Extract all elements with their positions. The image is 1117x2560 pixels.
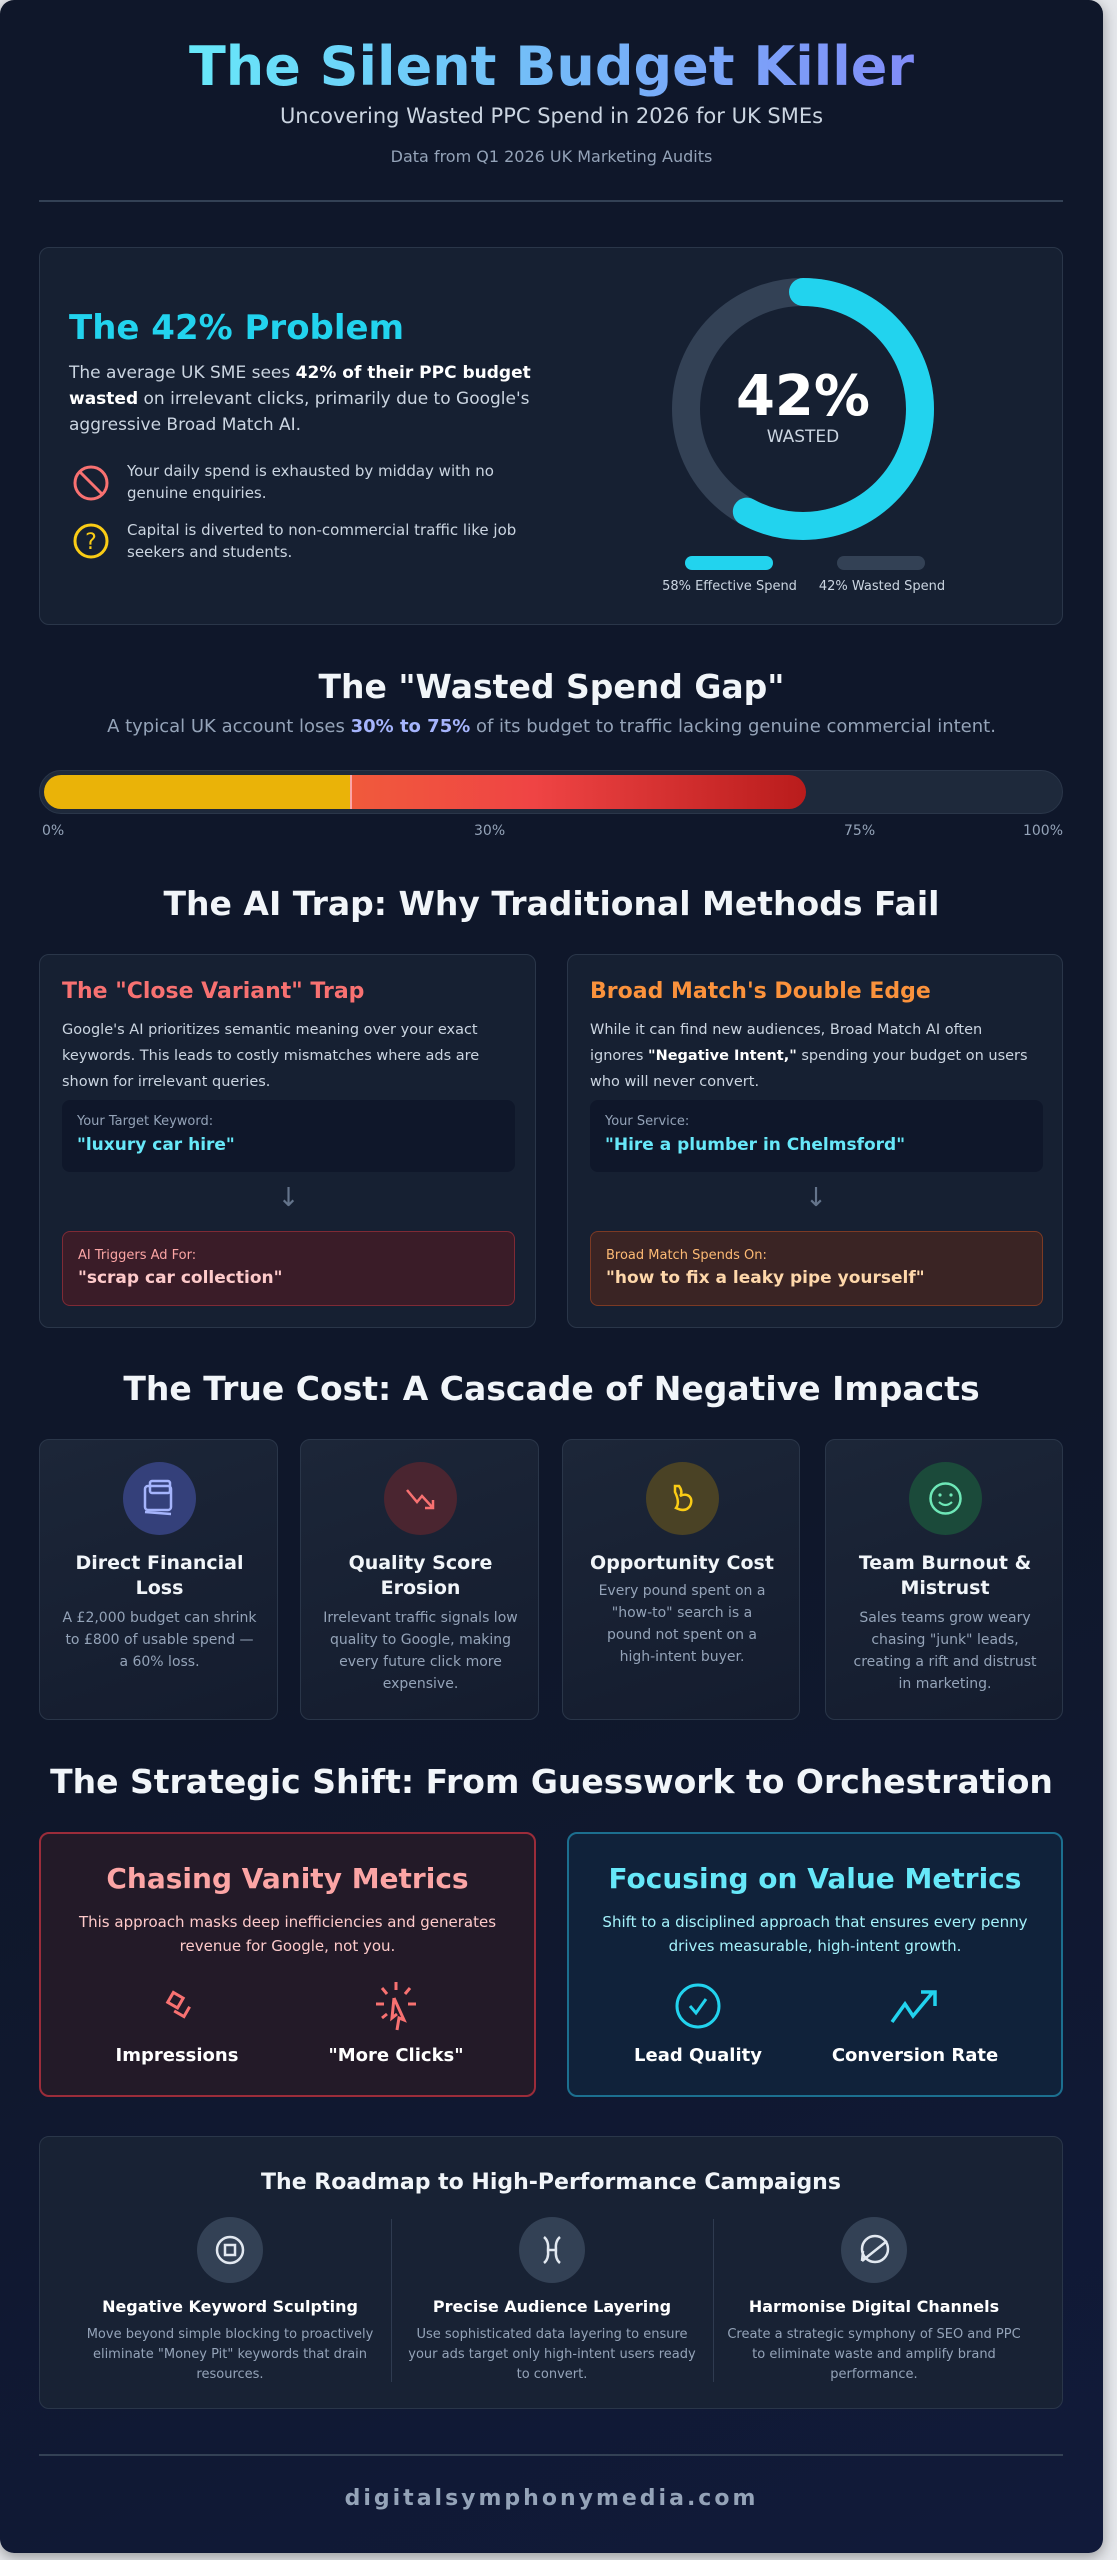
icon: trending down [384,1462,457,1535]
panel: value metrics: Focusing on Value Metrics [609,1862,1021,1895]
card: opportunity cost [562,1439,800,1720]
box: service [590,1100,1043,1172]
card: opportunity cost: Every pound spent on a "how-to" search is a pound not spent on a high-intent buyer. [599,1583,765,1665]
box: target keyword [62,1100,515,1172]
donut chart: WASTED [767,427,839,447]
paragraph: The average UK SME sees 42% of their PPC budget wasted on irrelevant clicks, primarily due to Google's aggressive Broad Match AI. [69,363,531,435]
bar labels [42,823,1063,839]
box: spends on: Broad Match Spends On: [606,1248,767,1263]
panel: broad match [567,954,1063,1328]
card: direct financial loss [39,1439,278,1720]
box: triggered query [62,1231,515,1306]
arrow: ↓ [805,1183,827,1213]
metric: impressions [116,1990,238,2066]
panel: broad match: While it can find new audiences, Broad Match AI often ignores "Negative Intent," spending your budget on users who will never convert. [590,1022,1028,1090]
metric: more clicks [328,1982,464,2066]
icon: question: ? [85,530,97,555]
step: negative keyword sculpting: Move beyond simple blocking to proactively eliminate "Money Pit" keywords that drain resources. [87,2327,373,2382]
metric: conversion rate [832,1990,998,2066]
panel: value metrics [567,1832,1063,2097]
item: diverted capital: Capital is diverted to non-commercial traffic like job seekers and students. [127,521,516,561]
step: negative keyword sculpting: Negative Keyword Sculpting [102,2297,358,2316]
box: service: "Hire a plumber in Chelmsford" [605,1135,905,1155]
data source: Data from Q1 2026 UK Marketing Audits [391,147,712,166]
icon: wallet [123,1462,196,1535]
box: target keyword: Your Target Keyword: [77,1114,213,1129]
heading: 42% problem: The 42% Problem [69,308,404,348]
card: team burnout: Sales teams grow weary chasing "junk" leads, creating a rift and distrust in marketing. [854,1610,1036,1692]
item: no enquiries: Your daily spend is exhausted by midday with no genuine enquiries. [127,462,494,502]
donut chart: 42% [736,364,870,429]
panel: value metrics: Shift to a disciplined approach that ensures every penny drives measurable, high-intent growth. [602,1913,1028,1955]
step: harmonise channels: Create a strategic symphony of SEO and PPC to eliminate waste and amplify brand performance. [727,2327,1021,2382]
footer: digitalsymphonymedia.com [345,2486,758,2511]
metric: more clicks: "More Clicks" [328,2045,464,2066]
roadmap heading: The Roadmap to High-Performance Campaigns [261,2170,841,2195]
legend [662,556,945,594]
panel: vanity metrics: Chasing Vanity Metrics [106,1862,469,1895]
metric: lead quality [634,1984,762,2066]
panel: broad match: Broad Match's Double Edge [590,979,931,1004]
card: quality score: Quality Score Erosion [349,1552,492,1599]
card: quality score [300,1439,539,1720]
subtitle: Uncovering Wasted PPC Spend in 2026 for UK SMEs [280,104,823,128]
step: harmonise channels: Harmonise Digital Channels [749,2297,999,2316]
title: The Silent Budget Killer [189,35,914,98]
icon: piggy [646,1462,719,1535]
card: direct financial loss: A £2,000 budget can shrink to £800 of usable spend — a 60% loss. [63,1610,256,1670]
step: audience layering [408,2217,696,2382]
metric: conversion rate: Conversion Rate [832,2045,998,2066]
heading: AI trap: The AI Trap: Why Traditional Methods Fail [164,884,939,923]
heading: true cost: The True Cost: A Cascade of Negative Impacts [123,1369,980,1408]
donut chart [672,278,934,540]
card: team burnout [825,1439,1063,1720]
card: team burnout: Team Burnout & Mistrust [859,1552,1031,1599]
panel: roadmap [39,2136,1063,2409]
bar labels: 30% [474,823,505,839]
step: audience layering: Precise Audience Layering [433,2297,671,2316]
panel: close variant trap: Google's AI prioritizes semantic meaning over your exact keywords. This leads to costly mismatches where ads are shown for irrelevant queries. [62,1022,479,1090]
icon: question [74,524,108,558]
bar labels: 0% [42,823,64,839]
bar labels: 100% [1023,823,1063,839]
arrow: ↓ [278,1183,299,1213]
bar labels: 75% [844,823,875,839]
box: spends on [590,1231,1043,1306]
box: service: Your Service: [605,1114,689,1129]
panel: close variant trap [39,954,536,1328]
gap subtitle: A typical UK account loses 30% to 75% of its budget to traffic lacking genuine commercial intent. [107,716,996,737]
box: spends on: "how to fix a leaky pipe yourself" [606,1268,925,1288]
box: triggered query: AI Triggers Ad For: [78,1248,196,1263]
panel: vanity metrics: This approach masks deep inefficiencies and generates revenue for Google, not you. [79,1913,496,1955]
bar chart: wasted gap [39,770,1063,814]
step: negative keyword sculpting [87,2217,373,2382]
legend: 42% Wasted Spend [819,579,945,594]
metric: lead quality: Lead Quality [634,2045,762,2066]
step: harmonise channels [727,2217,1021,2382]
card: opportunity cost: Opportunity Cost [590,1552,774,1574]
box: target keyword: "luxury car hire" [77,1135,235,1155]
panel: vanity metrics [39,1832,536,2097]
icon: smile [909,1462,982,1535]
panel: close variant trap: The "Close Variant" Trap [62,979,364,1004]
card: quality score: Irrelevant traffic signals low quality to Google, making every future click more expensive. [323,1610,518,1692]
icon: prohibited [74,466,108,500]
step: audience layering: Use sophisticated data layering to ensure your ads target only high-intent users ready to convert. [408,2327,696,2382]
panel: 42% problem [39,247,1063,625]
legend: 58% Effective Spend [662,579,797,594]
box: triggered query: "scrap car collection" [78,1268,282,1288]
card: direct financial loss: Direct Financial Loss [76,1552,243,1599]
metric: impressions: Impressions [116,2045,238,2066]
heading: strategic shift: The Strategic Shift: From Guesswork to Orchestration [50,1762,1053,1801]
heading: wasted spend gap: The "Wasted Spend Gap" [318,667,784,706]
